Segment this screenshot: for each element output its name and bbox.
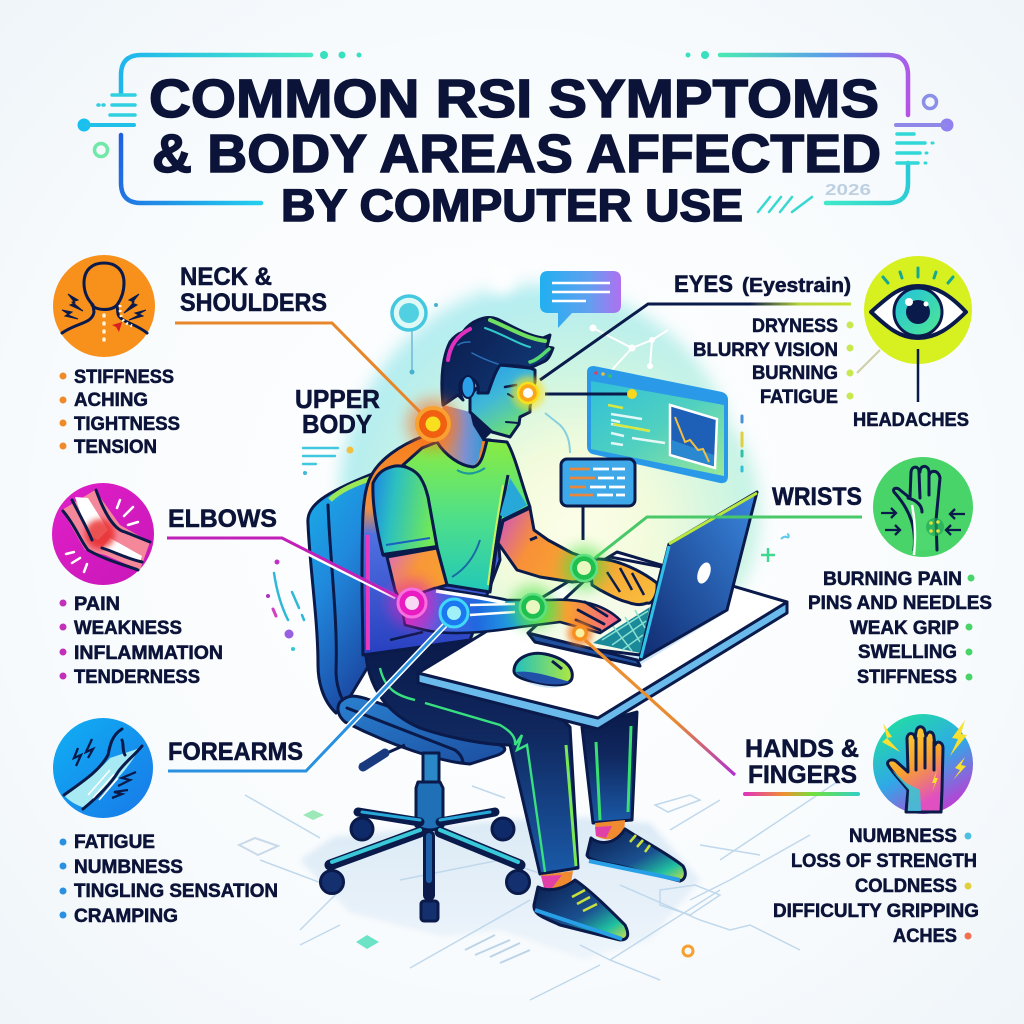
laptop base and keyboard [528, 557, 662, 666]
symptom list [773, 826, 979, 947]
t-shirt [403, 440, 530, 592]
icon: wrist [873, 457, 973, 557]
symptom list: WEAKNESS [74, 618, 182, 639]
hair highlights [448, 320, 549, 364]
symptom list: BLURRY VISION [693, 340, 838, 361]
symptom list: FATIGUE [74, 832, 155, 853]
mouse [512, 651, 574, 693]
symptom list: CRAMPING [74, 906, 178, 927]
icon: neck pain [53, 255, 155, 357]
ear [462, 376, 474, 398]
plus sparkle [761, 534, 789, 562]
far arm [498, 508, 657, 605]
panel: forearms [53, 718, 303, 927]
symptom list [60, 594, 223, 688]
side dashes [740, 416, 744, 471]
title: BY COMPUTER USE [281, 180, 743, 231]
heading: SHOULDERS [180, 289, 327, 317]
symptom list: LOSS OF STRENGTH [791, 851, 977, 872]
decorative dashes near chair [266, 560, 304, 651]
panel: eyes [674, 256, 972, 431]
headaches callout [853, 349, 969, 431]
icon: elbow joint [52, 483, 154, 585]
symptom list: INFLAMMATION [74, 643, 223, 664]
heading: NECK & [180, 263, 272, 291]
marker: wrist 1 [511, 585, 555, 629]
heading: (Eyestrain) [742, 275, 851, 297]
symptom list: SWELLING [858, 642, 957, 663]
heading: ELBOWS [168, 505, 277, 533]
heading: EYES [674, 271, 733, 298]
symptom list: ACHING [74, 390, 148, 411]
connector: eye to screen [545, 389, 637, 399]
heading: FINGERS [748, 761, 857, 789]
symptom list: FATIGUE [760, 387, 838, 408]
near upper arm [387, 548, 447, 612]
heading: WRISTS [772, 483, 862, 511]
heading [180, 263, 327, 317]
symptom list: BURNING PAIN [823, 569, 962, 590]
ring node [392, 296, 438, 374]
person [362, 318, 657, 655]
connector: forearms [168, 625, 445, 771]
hair [442, 318, 553, 405]
year label: 2026 [825, 182, 871, 199]
icon: eye [864, 256, 972, 364]
heading [743, 735, 860, 796]
symptom list: PAIN [74, 594, 120, 615]
near forearm and hand [390, 588, 620, 640]
back accent stripe [366, 535, 370, 650]
chat bubble [540, 271, 621, 328]
marker: fingers [567, 620, 593, 646]
chair [308, 474, 530, 921]
panel: wrists [772, 457, 992, 688]
marker: elbow [388, 579, 436, 627]
symptom list: TENSION [74, 437, 157, 458]
marker: eye [511, 376, 545, 410]
panel: elbows [52, 483, 277, 688]
symptom list: WEAK GRIP [850, 618, 959, 639]
heading: HANDS & [745, 735, 859, 763]
floor shadow and circuit pattern [239, 780, 840, 1000]
symptom list: DIFFICULTY GRIPPING [773, 901, 979, 922]
upper body label: BODY [302, 409, 372, 439]
jaw shadow [470, 412, 492, 441]
symptom list: STIFFNESS [74, 367, 174, 388]
marker: forearm [440, 599, 468, 627]
upper body label: UPPER [295, 384, 380, 414]
title: & BODY AREAS AFFECTED [152, 124, 881, 184]
symptom list: TIGHTNESS [74, 414, 180, 435]
connector: hands [585, 640, 735, 775]
marker: wrist 2 [562, 546, 606, 590]
symptom list: BURNING [752, 363, 838, 384]
desk [418, 552, 787, 729]
heading: FOREARMS [168, 738, 303, 766]
symptom list [60, 367, 180, 458]
symptom list: NUMBNESS [849, 826, 957, 847]
icon: forearm [53, 718, 153, 818]
face [470, 365, 535, 437]
connector: elbows [167, 538, 398, 597]
connector: eyes [540, 304, 851, 380]
code popup [561, 459, 635, 540]
symptom list: TINGLING SENSATION [74, 881, 278, 902]
symptom list: ACHES [893, 926, 957, 947]
symptom list: DRYNESS [752, 316, 838, 337]
legs and shoes [365, 640, 685, 940]
symptom list [693, 316, 880, 408]
symptom list: TENDERNESS [74, 667, 200, 688]
symptom list [60, 832, 278, 927]
panel: neck and shoulders [53, 255, 327, 458]
desktop window [587, 366, 728, 483]
symptom list [808, 569, 992, 688]
heading [674, 271, 851, 298]
background glow behind figure [340, 266, 760, 680]
facial features [505, 385, 518, 423]
symptom list: PINS AND NEEDLES [808, 593, 992, 614]
icon: rainbow hand [873, 714, 973, 814]
upper body label [295, 384, 380, 475]
head and hair [442, 318, 553, 441]
torso back [362, 436, 500, 655]
laptop screen [640, 492, 757, 660]
shirt details [452, 468, 530, 590]
panel: hands and fingers [743, 714, 979, 947]
title: COMMON RSI SYMPTOMS [149, 69, 879, 129]
near sleeve [373, 466, 437, 555]
connector: wrists [595, 517, 862, 558]
headaches callout: HEADACHES [853, 410, 969, 431]
marker: neck [407, 398, 459, 450]
sleeve hem [383, 538, 437, 555]
title [149, 69, 881, 231]
symptom list: COLDNESS [855, 876, 957, 897]
neck [437, 405, 483, 468]
symptom list: NUMBNESS [74, 857, 183, 878]
title frame [78, 51, 954, 212]
connector: neck [175, 323, 420, 412]
symptom list: STIFFNESS [857, 667, 957, 688]
